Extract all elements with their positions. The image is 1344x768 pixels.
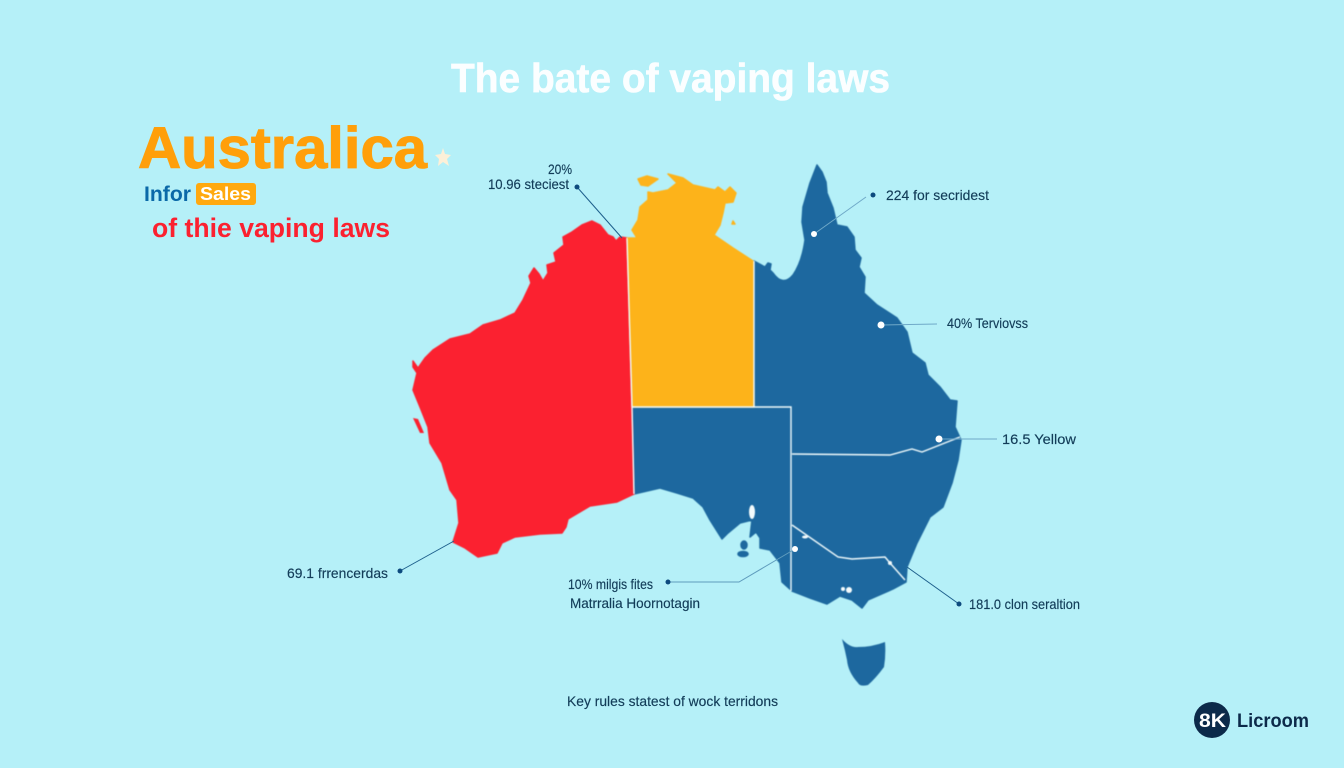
callout: for secridest: 224 for secridest: [886, 187, 989, 203]
callout: 40% Terviovss: [878, 315, 1028, 331]
logo: 8K: [1199, 711, 1226, 732]
callout: clon seraltion: [907, 567, 1080, 612]
map of Australia: [413, 165, 961, 686]
callout: 20%: 10.96 steciest: [488, 176, 569, 192]
callout: milgis fites: 10% milgis fites: [568, 576, 653, 592]
callout: milgis fites: Matrralia Hoornotagin: [570, 595, 700, 611]
logo: Licroom: [1237, 711, 1309, 732]
island: Western Australia coast: [413, 418, 424, 433]
callout: for secridest: [811, 187, 989, 237]
callout: 20%: 20%: [548, 161, 572, 177]
heading: Australica: Australica: [138, 116, 428, 181]
callout: 40% Terviovss: 40% Terviovss: [947, 315, 1028, 331]
logo: [1194, 702, 1309, 738]
icon: star: [435, 148, 451, 166]
callout: 16.5 Yellow: 16.5 Yellow: [1002, 431, 1077, 447]
callout: milgis fites: [568, 546, 798, 611]
subheading: Infor: Infor: [144, 183, 191, 206]
region: Western Australia: [413, 221, 634, 557]
title: The bate of vaping laws: [451, 55, 890, 101]
footer caption: Key rules statest of wock terridons: [567, 693, 778, 709]
callout: 16.5 Yellow: [936, 431, 1077, 447]
region: Northern Territory: [627, 174, 754, 407]
callout: 20%: [488, 161, 622, 238]
badge: Sales: Sales: [200, 184, 251, 204]
heading block: [138, 116, 451, 243]
callout: clon seraltion: 181.0 clon seraltion: [969, 596, 1080, 612]
callout: frrencerdas: 69.1 frrencerdas: [287, 565, 388, 581]
region: Tasmania: [842, 639, 885, 686]
region: Queensland, New South Wales, Victoria and South Australia: [632, 165, 961, 608]
callout: frrencerdas: [287, 541, 454, 581]
subheading: of thie vaping laws: of thie vaping laws: [152, 213, 390, 243]
white lake and map details: [749, 505, 892, 593]
